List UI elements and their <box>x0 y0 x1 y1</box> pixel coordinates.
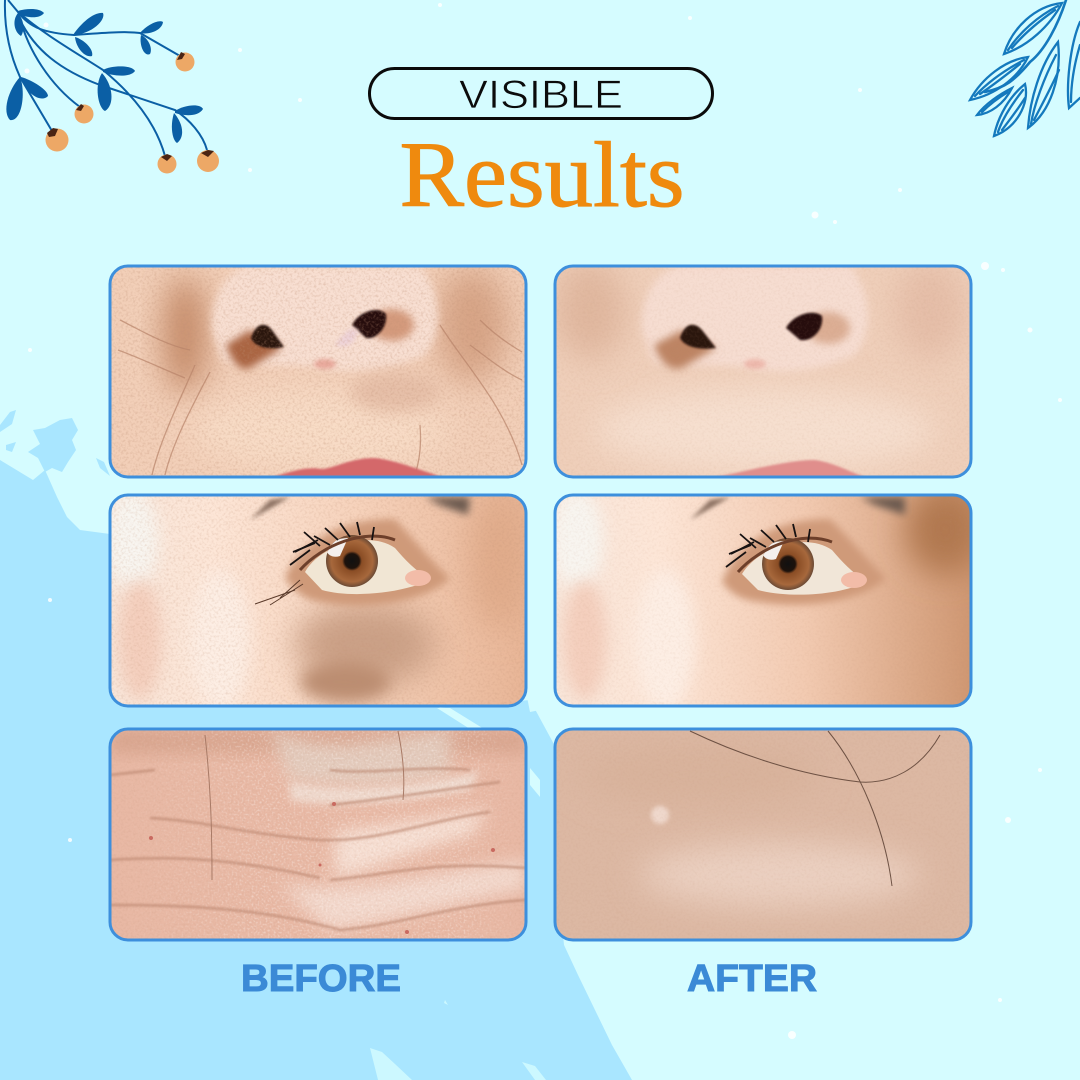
photo: after nose <box>554 260 971 477</box>
heading: Results: Results <box>400 124 684 227</box>
heading: visible pill <box>370 68 712 118</box>
frame: before nose <box>110 266 526 477</box>
decoration: blue outlined leaves <box>970 0 1080 136</box>
label: before: BEFORE <box>241 958 401 1000</box>
photo: before eye <box>106 490 530 710</box>
photo: after eye <box>556 496 970 704</box>
frame: after forehead <box>555 729 971 940</box>
photo: before forehead <box>110 729 526 940</box>
photo: after forehead <box>555 729 971 940</box>
label: after: AFTER <box>687 958 817 1000</box>
frame: before forehead <box>110 729 526 940</box>
frame: after eye <box>555 495 971 706</box>
photo: before nose <box>110 266 526 477</box>
heading: visible pill: VISIBLE <box>459 73 623 117</box>
decoration: branch with orange berries <box>5 0 219 174</box>
frame: before eye <box>110 495 526 706</box>
frame: after nose <box>555 266 971 477</box>
